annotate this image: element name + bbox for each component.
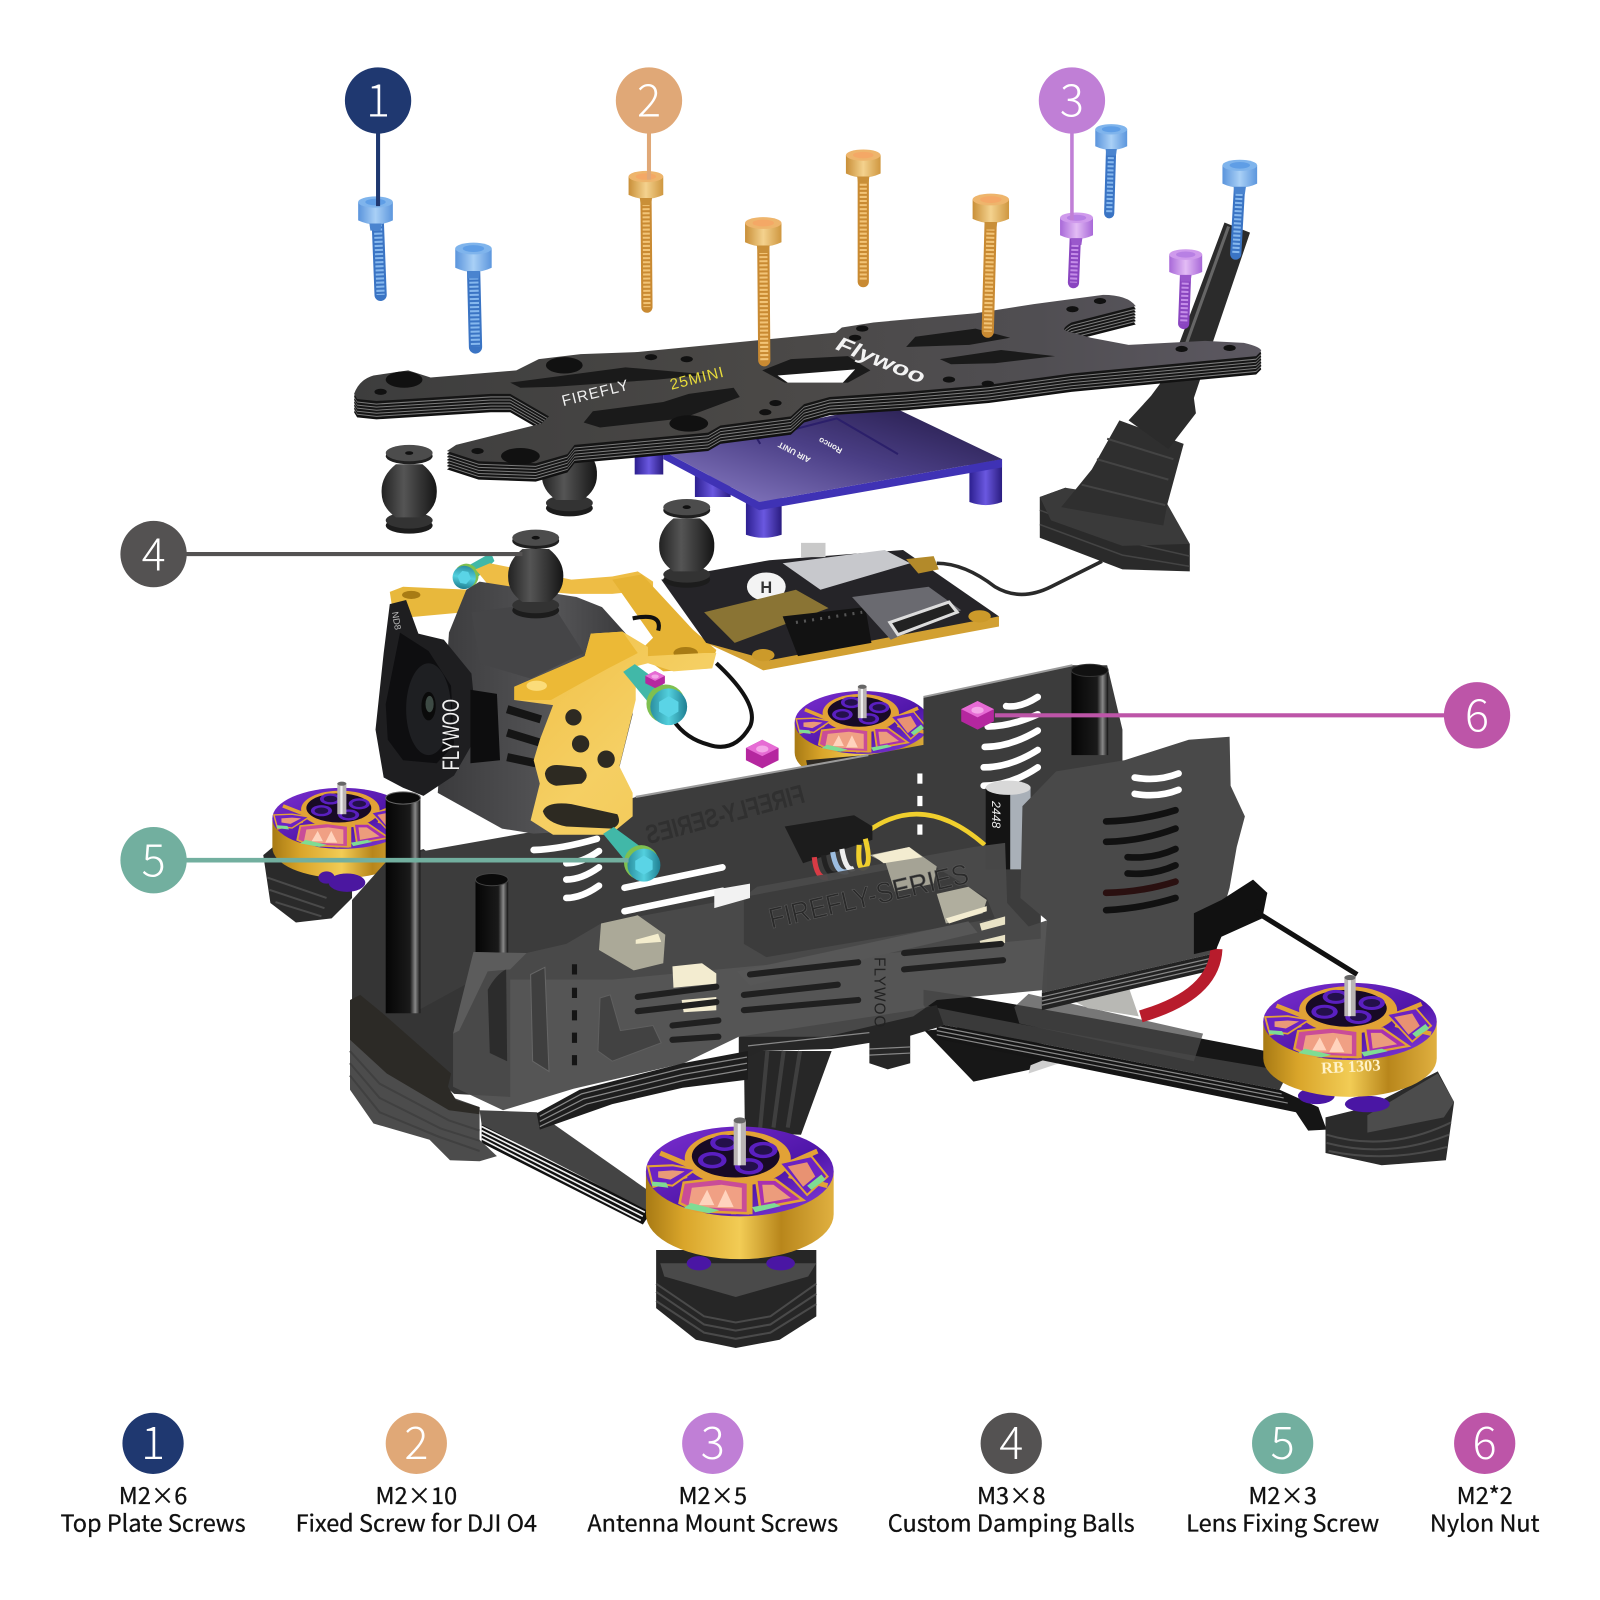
antenna mount [1040, 222, 1250, 571]
small nut behind screw [645, 671, 665, 688]
frame: front wall [453, 843, 1047, 1130]
callout 3 [1039, 64, 1105, 220]
ND label: ND8 [390, 611, 403, 631]
camera [376, 582, 633, 834]
cable: right arm [923, 990, 1276, 1069]
air unit plate [635, 404, 1002, 538]
legend item 6: Nylon Nut [1430, 1505, 1540, 1539]
camera front face [376, 600, 478, 796]
frame: right wall [1020, 737, 1245, 1010]
lens [406, 663, 451, 755]
connector: top middle [869, 847, 937, 892]
plate stack edges [354, 297, 1261, 482]
motor screws: right [1298, 1088, 1390, 1112]
drone assembly [263, 124, 1454, 1348]
red battery wire [1141, 949, 1216, 1016]
air unit lettering [777, 435, 844, 464]
gold bracket: side plate [514, 632, 716, 835]
legend item 3 [587, 1407, 838, 1539]
arm: right [923, 990, 1327, 1131]
stack: front wall base [537, 1051, 748, 1130]
rear rod: right [1194, 880, 1357, 974]
nylon nut: callout 6 [961, 701, 994, 730]
plate recess [757, 418, 898, 454]
inner post [476, 873, 508, 959]
black camera cable [633, 617, 752, 747]
silver clip [801, 543, 826, 557]
cream connector: centre [672, 963, 716, 1012]
screws: orange M2x10 [629, 149, 1009, 360]
motor: rear right [795, 685, 930, 784]
callout 5: 5 [142, 825, 166, 890]
legend item 1: 1 [141, 1407, 165, 1472]
board mount holes [752, 610, 991, 661]
screws: purple M2x5 [1060, 212, 1202, 323]
damping ball: board [659, 499, 714, 588]
gold bracket: rear arm [390, 563, 716, 671]
mounting holes [374, 298, 1236, 464]
bracket holes [543, 709, 619, 829]
capacitor [986, 781, 1031, 869]
legend [61, 1407, 1540, 1539]
legend item 1: Top Plate Screws [61, 1505, 246, 1539]
legend item 5 [1186, 1407, 1379, 1539]
callout 1 [345, 64, 411, 206]
lens surround [386, 633, 454, 763]
white PCB bits [714, 884, 750, 908]
screws: blue M2x6 [358, 124, 1127, 347]
landing pad: front [656, 1250, 816, 1348]
USB-C port [852, 587, 961, 640]
motor lettering: right: RB 1303 [1321, 1055, 1381, 1077]
callout 2: 2 [637, 64, 661, 129]
legend item 5: 5 [1271, 1407, 1295, 1472]
callout 3: 3 [1060, 64, 1084, 129]
nylon nut: loose [746, 740, 779, 768]
frame: left side wall and interior [352, 849, 510, 1097]
plate top surface [354, 295, 1261, 463]
cyan screw: lens [603, 827, 660, 882]
damping ball: camera mount [508, 530, 563, 618]
silver tab [1029, 1053, 1065, 1073]
legend item 6: M2*2 [1457, 1477, 1513, 1511]
battery strap block [924, 1026, 1066, 1082]
landing pad: right [1326, 1071, 1454, 1165]
legend item 3: M2×5 [678, 1477, 747, 1511]
plate edge [663, 451, 1002, 510]
cream connector: left [599, 915, 665, 970]
legend item 6: 6 [1473, 1407, 1497, 1472]
leg: left rear [635, 445, 663, 474]
legend item 4: M3×8 [977, 1477, 1045, 1511]
motor: front [646, 1117, 834, 1259]
blue screw 2 [455, 243, 492, 347]
purple screw 1 [1060, 212, 1093, 283]
cable sleeve: right arm [1014, 994, 1203, 1061]
legend item 4: 4 [999, 1407, 1023, 1472]
orange screw 1 [629, 171, 663, 307]
callout 5 [120, 825, 629, 893]
legend item 5: Lens Fixing Screw [1186, 1505, 1379, 1539]
left rear post [386, 792, 420, 1013]
camera upper block [471, 602, 584, 679]
air unit lettering: Ronco [817, 435, 844, 455]
callout 2 [616, 64, 682, 180]
cyan screw: top [623, 664, 687, 725]
plate cutouts [510, 329, 1055, 428]
camera lens tube [470, 690, 500, 763]
antenna shaft [1129, 222, 1250, 449]
leg: front [746, 496, 782, 538]
plate top [663, 404, 1002, 502]
top plate [354, 295, 1261, 482]
antenna tower [1061, 420, 1184, 526]
orange screw 4 [973, 194, 1009, 332]
FC cover [744, 862, 995, 957]
centre hole opening [778, 369, 855, 383]
capacitor label: 2448 [989, 800, 1003, 828]
motor: right [1263, 975, 1437, 1112]
legend item 2 [296, 1407, 537, 1539]
FC connector [785, 815, 872, 878]
antenna tower grain [1082, 439, 1173, 505]
air unit lettering: AIR UNIT [777, 440, 812, 464]
legend item 1: M2×6 [119, 1477, 187, 1511]
frame: rear wall [418, 665, 1122, 1010]
callout 1: 1 [366, 64, 390, 129]
VTX board [661, 543, 999, 670]
FC lettering: FIREFLY-SERIES [766, 858, 972, 935]
legend item 2: M2×10 [376, 1477, 457, 1511]
legend item 4 [888, 1407, 1135, 1539]
motor shadow through rear wall [806, 750, 923, 821]
purple screw 2 [1169, 249, 1202, 323]
leg: right [969, 459, 1002, 505]
motor: rear left [272, 782, 411, 878]
legend item 3: 3 [701, 1407, 725, 1472]
orange screw 2 [745, 217, 781, 360]
callout 4: 4 [142, 518, 166, 583]
connector: centre right [937, 887, 987, 923]
slots: rear wall [534, 697, 1038, 911]
plate model: 25MINI [668, 364, 726, 394]
landing pad: left front [350, 995, 497, 1161]
small window squares [917, 773, 922, 835]
metal shield [783, 550, 910, 590]
antenna base [1040, 488, 1190, 571]
front post shoulder [453, 952, 527, 1034]
vertical tick slots [572, 964, 577, 1065]
landing pad: rear left [263, 845, 352, 922]
legend item 6 [1430, 1407, 1540, 1539]
arm: left front [480, 1110, 655, 1224]
FC connector wires [867, 814, 985, 845]
post: rear right [1071, 664, 1108, 755]
screw: blue antenna side [1222, 160, 1257, 254]
legend item 4: Custom Damping Balls [888, 1505, 1135, 1539]
motor screws: front [687, 1256, 795, 1270]
front wall slots [638, 944, 1003, 1040]
wall cutouts: left section [488, 969, 507, 1061]
legend item 1 [61, 1407, 246, 1539]
shaft highlight [1173, 227, 1229, 380]
H badge [747, 572, 786, 601]
connector: right [980, 916, 1005, 947]
legend item 2: Fixed Screw for DJI O4 [296, 1505, 537, 1539]
leg: inner [695, 476, 731, 497]
legend item 2: 2 [404, 1407, 428, 1472]
diagonal bar [737, 921, 978, 986]
camera brand text: FLYWOO [438, 699, 465, 770]
plate name: FIREFLY [560, 377, 631, 410]
arm: rear centre [744, 1051, 832, 1135]
stack below centre of frame [739, 1005, 944, 1069]
callout 6 [995, 680, 1510, 748]
FLYWOO lettering: front wall: FLYWOO [870, 957, 887, 1028]
black connector [783, 607, 871, 656]
motor mount screws: rear left [318, 871, 365, 892]
camera heat fins [507, 709, 541, 763]
blue screw 3 [1095, 124, 1127, 213]
antenna cable [937, 561, 1102, 594]
blue screw 1 [358, 196, 393, 295]
callout 6: 6 [1465, 680, 1489, 745]
callout 4 [120, 518, 522, 587]
legend item 5: M2×3 [1248, 1477, 1317, 1511]
orange screw 3 [846, 149, 881, 282]
damping ball: rear [382, 445, 437, 534]
board top [661, 550, 999, 660]
damping ball: under plate [542, 428, 597, 516]
legend item 3: Antenna Mount Screws [587, 1505, 838, 1539]
silver tape near wire [1065, 990, 1139, 1016]
H badge: H [760, 579, 772, 597]
gold pad row [704, 590, 829, 643]
antenna connector [906, 556, 939, 573]
cyan screw: rear bracket [451, 547, 496, 594]
camera housing [438, 582, 633, 834]
plate logo: Flywoo [833, 333, 928, 389]
embossed lettering: rear wall: FIREFLY-SERIES [642, 779, 808, 850]
slots: right wall [1106, 773, 1179, 910]
board gold edge [706, 616, 999, 670]
